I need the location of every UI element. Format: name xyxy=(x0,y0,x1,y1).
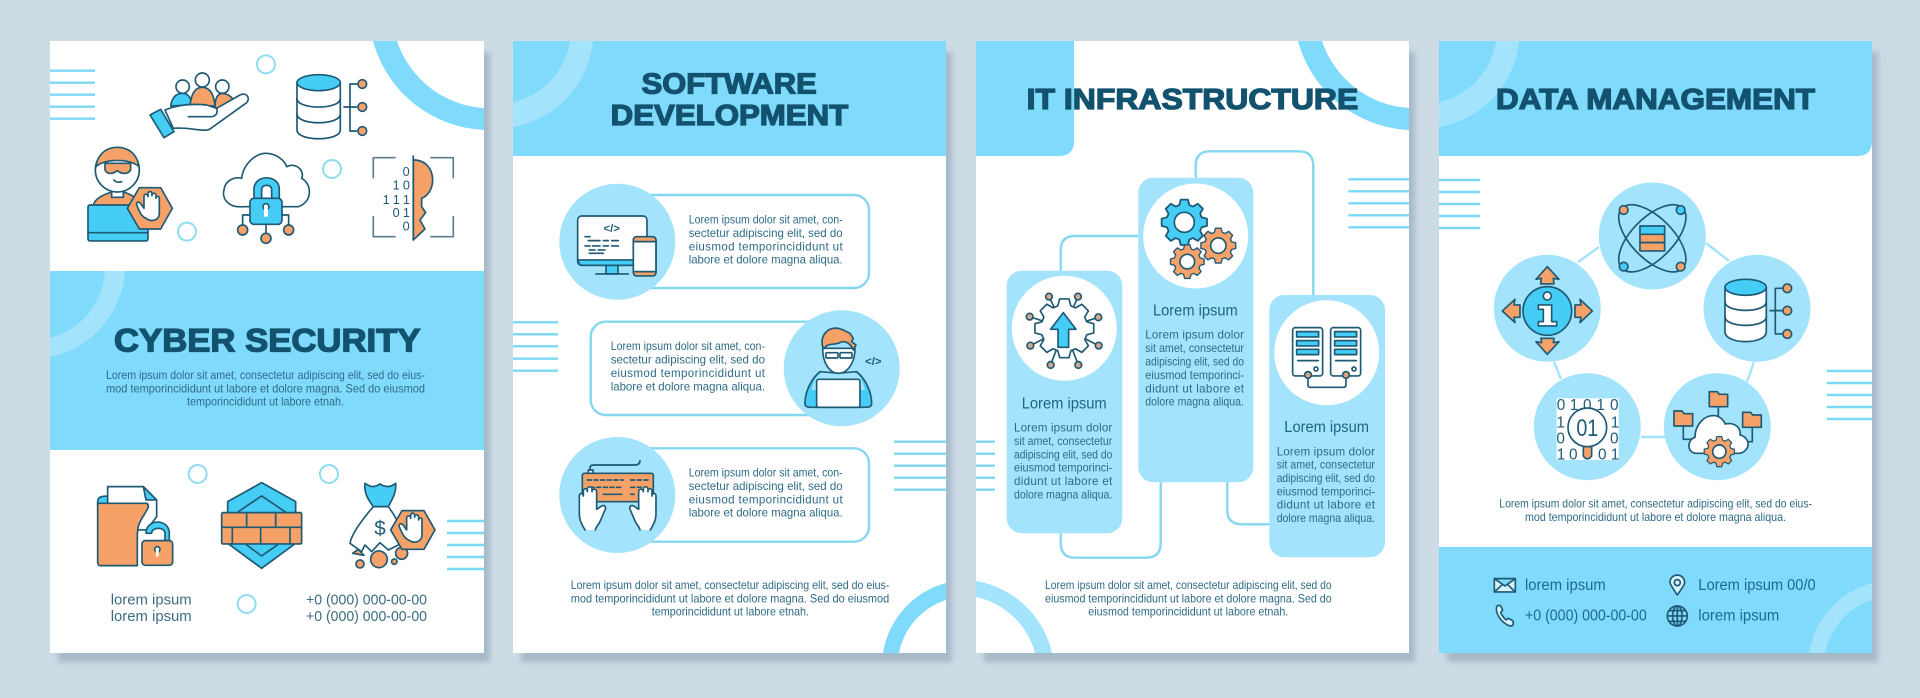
contact text right: +0 (000) 000-00-00 xyxy=(306,608,427,625)
icon: money bag with stop hand xyxy=(350,483,435,568)
card 2: developer xyxy=(591,310,900,426)
text block: didunt ut labore et xyxy=(1277,499,1376,512)
text block: eiusmod temporinci- xyxy=(1014,462,1112,475)
icon: envelope xyxy=(1494,579,1515,592)
contact text xyxy=(1525,577,1816,625)
node: atom server xyxy=(1599,182,1706,290)
card 1: monitor xyxy=(559,184,869,300)
text block: Lorem ipsum dolor sit amet, con- xyxy=(689,213,843,226)
icon: binary magnifier: 1 xyxy=(1570,397,1578,414)
text block: dolore magna aliqua. xyxy=(1277,512,1375,525)
text block: sectetur adipiscing elit, sed do xyxy=(689,480,843,493)
node: cloud folders xyxy=(1664,373,1771,480)
icon: map pin xyxy=(1670,575,1685,595)
icon: binary magnifier: 1 xyxy=(1556,414,1565,431)
node: information xyxy=(1494,255,1601,362)
text block: eiusmod temporincididunt ut xyxy=(689,240,843,253)
text block: footer: Lorem ipsum dolor sit amet, consectetur adipiscing elit, sed do xyxy=(1045,579,1332,592)
diagram connectors xyxy=(1554,243,1754,437)
card: gears xyxy=(1138,178,1253,482)
text block: sit amet, consectetur xyxy=(1014,435,1112,448)
node: binary search xyxy=(1534,373,1641,480)
icon: database network xyxy=(297,75,367,139)
text block: Lorem ipsum dolor sit amet, con- xyxy=(611,340,765,353)
icon: binary key: 0 1 xyxy=(393,206,410,220)
icon: globe xyxy=(1667,606,1687,626)
text block: footer: mod temporincididunt ut labore et dolore magna. Sed do eiusmod xyxy=(571,592,889,605)
icon: binary magnifier: 01 xyxy=(1576,415,1598,442)
text block: didunt ut labore et xyxy=(1145,382,1245,395)
text block: labore et dolore magna aliqua. xyxy=(689,254,843,267)
text block: dolore magna aliqua. xyxy=(1014,488,1112,501)
icon: binary magnifier: 0 xyxy=(1569,446,1578,463)
text block xyxy=(689,467,843,520)
heading: Lorem ipsum xyxy=(1284,419,1369,436)
icon: monitor and phone: </> xyxy=(603,223,620,235)
text block xyxy=(106,369,425,409)
icon: atom with server xyxy=(1608,194,1697,283)
icon: binary magnifier: 0 xyxy=(1610,430,1619,447)
text block xyxy=(1499,498,1812,524)
text block: Lorem ipsum dolor sit amet, consectetur adipiscing elit, sed do eius- xyxy=(1499,498,1812,511)
text block xyxy=(1277,445,1376,525)
text block: adipiscing elit, sed do xyxy=(1014,448,1112,461)
text block: Lorem ipsum dolor sit amet, con- xyxy=(689,467,843,480)
icon: binary magnifier: 1 xyxy=(1596,397,1605,414)
text block: sectetur adipiscing elit, sed do xyxy=(611,354,765,367)
icon: info with arrows xyxy=(1502,267,1592,354)
text block: eiusmod temporinci- xyxy=(1277,485,1375,498)
text block: footer xyxy=(1045,579,1332,619)
panel: software development xyxy=(513,41,946,653)
text block: footer: temporincididunt ut labore etnah. xyxy=(652,606,809,619)
icon: hacker with stop hand xyxy=(88,147,172,241)
icon: cloud with folders and gear xyxy=(1674,392,1761,467)
icon: money bag with stop hand: $ xyxy=(374,517,386,540)
text block: Lorem ipsum dolor xyxy=(1014,422,1112,435)
text block: sit amet, consectetur xyxy=(1277,459,1375,472)
text block: eiusmod temporincididunt ut xyxy=(689,494,843,507)
icon: binary magnifier: 1 xyxy=(1611,446,1619,463)
panel: data management xyxy=(1439,41,1872,653)
contact text left: lorem ipsum xyxy=(111,608,192,625)
text block: footer: eiusmod temporincididunt ut labore etnah. xyxy=(1088,606,1288,619)
text block: eiusmod temporincididunt ut xyxy=(611,367,766,380)
heading: Lorem ipsum xyxy=(1153,302,1238,319)
text block xyxy=(689,213,843,267)
text block xyxy=(611,340,766,393)
text block: labore et dolore magna aliqua. xyxy=(611,380,765,393)
icon: hands on keyboard xyxy=(579,461,656,530)
icon: binary magnifier: 0 xyxy=(1557,397,1565,414)
contact text: lorem ipsum xyxy=(1525,577,1606,594)
text block xyxy=(1014,422,1113,501)
title: CYBER SECURITY xyxy=(114,322,421,358)
contact text left xyxy=(111,591,192,625)
text block: mod temporincididunt ut labore et dolore magna aliqua. xyxy=(1525,511,1786,524)
icon: binary magnifier: 0 xyxy=(1598,446,1607,463)
panel: cyber security xyxy=(50,41,484,653)
card 3: keyboard xyxy=(559,437,869,553)
text block: mod temporincididunt ut labore et dolore magna. Sed do eiusmod xyxy=(106,382,425,395)
icon: monitor and phone xyxy=(578,216,656,276)
text block: Lorem ipsum dolor xyxy=(1145,329,1244,342)
icon: firewall shield xyxy=(222,483,302,568)
icon: binary magnifier: 0 xyxy=(1556,430,1565,447)
title: DATA MANAGEMENT xyxy=(1496,84,1815,116)
node: database xyxy=(1704,255,1810,362)
card: network gear xyxy=(1007,271,1122,533)
text block: footer: eiusmod temporincididunt ut labore et dolore magna. Sed do xyxy=(1045,592,1332,605)
text block: sit amet, consectetur xyxy=(1145,342,1244,355)
contact text right: +0 (000) 000-00-00 xyxy=(306,591,427,608)
text block: footer xyxy=(571,579,889,619)
contact text: lorem ipsum xyxy=(1698,608,1779,625)
icon: phone xyxy=(1496,605,1513,626)
icon: folder with open lock xyxy=(98,487,173,566)
card: servers xyxy=(1269,295,1385,557)
text block: labore et dolore magna aliqua. xyxy=(689,507,843,520)
text block: temporincididunt ut labore etnah. xyxy=(187,396,344,409)
panel: it infrastructure xyxy=(976,41,1409,653)
icon: binary key: 1 1 1 xyxy=(383,193,410,207)
text block: didunt ut labore et xyxy=(1014,475,1113,488)
contact footer xyxy=(1439,547,1872,653)
icon: developer with laptop xyxy=(805,328,882,407)
contact text right xyxy=(306,591,427,625)
icon: binary magnifier: 1 xyxy=(1557,446,1565,463)
text block: sectetur adipiscing elit, sed do xyxy=(689,227,843,240)
text block: footer: Lorem ipsum dolor sit amet, consectetur adipiscing elit, sed do eius- xyxy=(571,579,889,592)
text block: eiusmod temporinci- xyxy=(1145,369,1244,382)
title: SOFTWARE xyxy=(642,68,817,100)
icon: hand holding people xyxy=(150,73,248,138)
icon: binary magnifier xyxy=(1556,397,1619,463)
text block: Lorem ipsum dolor xyxy=(1277,445,1375,458)
icon: binary key: 0 xyxy=(403,219,410,233)
icon: database network xyxy=(1725,279,1792,342)
icon: binary key: 1 0 xyxy=(393,178,410,192)
text block: adipiscing elit, sed do xyxy=(1277,472,1375,485)
text block xyxy=(1145,329,1245,409)
contact text left: lorem ipsum xyxy=(111,591,192,608)
icon: gears xyxy=(1162,200,1236,278)
text block: Lorem ipsum dolor sit amet, consectetur adipiscing elit, sed do eius- xyxy=(106,369,425,382)
connectors xyxy=(1061,151,1313,558)
icon: binary key: 0 xyxy=(403,165,410,179)
icon: binary magnifier: 1 xyxy=(1611,414,1619,431)
icon: binary magnifier: 0 xyxy=(1583,397,1592,414)
contact text: Lorem ipsum 00/0 xyxy=(1698,577,1816,594)
title xyxy=(611,68,848,132)
heading: Lorem ipsum xyxy=(1022,395,1107,412)
icon: cloud with padlock xyxy=(224,153,309,243)
text block: adipiscing elit, sed do xyxy=(1145,356,1244,369)
icon: binary magnifier: 0 xyxy=(1610,397,1619,414)
icon: developer with laptop: </> xyxy=(865,356,882,368)
icon: binary key xyxy=(373,156,453,240)
text block: dolore magna aliqua. xyxy=(1145,396,1244,409)
title: DEVELOPMENT xyxy=(611,100,848,132)
icon: network gear with arrow xyxy=(1026,293,1102,368)
title: IT INFRASTRUCTURE xyxy=(1027,84,1358,116)
icon: server racks xyxy=(1293,328,1361,387)
contact text: +0 (000) 000-00-00 xyxy=(1525,608,1647,625)
